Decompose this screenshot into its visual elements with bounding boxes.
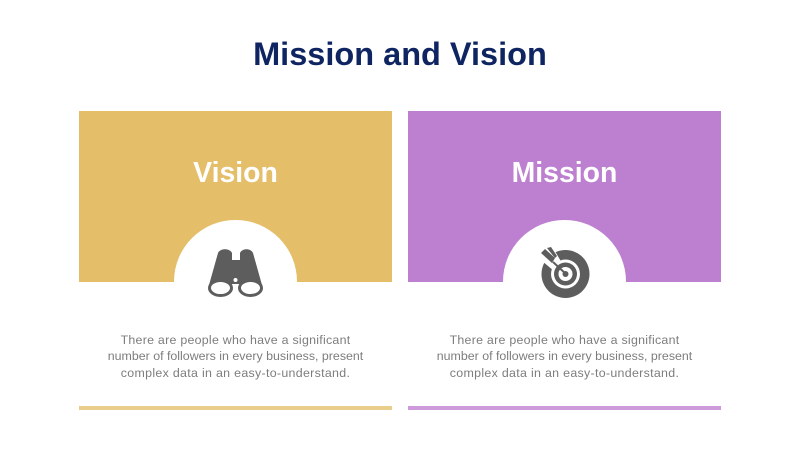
vision card background (79, 111, 392, 282)
vision bottom bar (79, 406, 392, 410)
vision description (108, 332, 364, 380)
vision heading: Vision (193, 157, 278, 189)
mission description: number of followers in every business, present (437, 349, 692, 363)
mission arch cutout (503, 220, 626, 282)
mission card background (408, 111, 721, 282)
icon: binoculars (208, 249, 263, 297)
icon: target with arrow (541, 247, 590, 298)
mission heading: Mission (512, 157, 617, 189)
vision description: complex data in an easy-to-understand. (121, 366, 350, 380)
mission description: There are people who have a significant (450, 332, 679, 346)
mission bottom bar (408, 406, 721, 410)
panel: vision (79, 111, 392, 410)
title: Mission and Vision (253, 36, 547, 72)
vision description: There are people who have a significant (121, 332, 350, 346)
vision arch cutout (174, 220, 297, 282)
mission description: complex data in an easy-to-understand. (450, 366, 679, 380)
mission description (437, 332, 692, 380)
panel: mission (408, 111, 721, 410)
vision description: number of followers in every business, present (108, 349, 363, 363)
